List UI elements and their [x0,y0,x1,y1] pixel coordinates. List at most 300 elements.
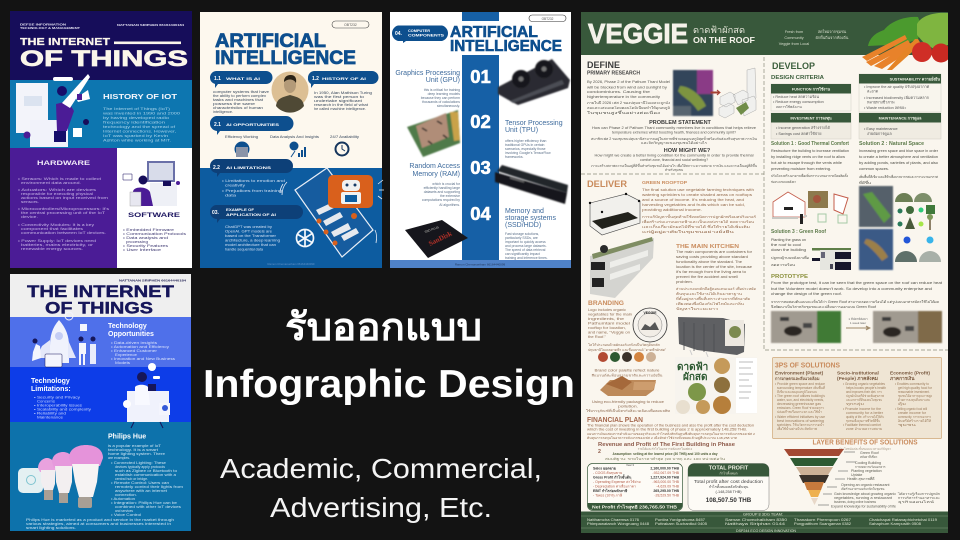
text block: philips hue: remotely control their lights from [115,485,183,489]
text block: ram: the extensive [440,194,460,198]
text block: gpu: simultaneously. [437,104,460,108]
text block: solution 1: hot air to escape through the vents while [771,161,842,165]
title: INTELLIGENCE [450,38,562,55]
table: profit and loss: -28,529.50 THB [654,494,680,498]
text block: history: IoT was sparked by Kevin [103,133,168,138]
column: economic: ชุมชน [898,423,918,428]
chart labels: benefit layers: ธุรกิจออนไลน์ [898,500,934,505]
text block: hardware list: sensors. [21,200,39,204]
icon: phone with chat bubbles [280,168,377,257]
text block: main kitchen: functionality above the standard. The [676,260,742,264]
column: socio-institutional: ทุกกลุ่ม [846,402,864,407]
heading: technology limitations: Technology [31,378,70,385]
column: economic: community. การขายอาหาร [898,415,931,419]
course tag [529,15,566,22]
pill: computer components: COMPONENTS [408,34,445,38]
chart labels: benefit layers [818,451,940,508]
text block: solution 3: ปลูกหญ้าบนหลังคาเพื่อ [771,255,809,260]
section: problem statement: temperature extremes whilst boosting health, finances and community spirit? [612,130,736,134]
column: economic: reasonable investment. [898,390,930,394]
text block: branding: vegetables for the main [588,312,632,316]
arrow: one week later: 1 สัปดาห์ต่อมา [848,317,868,321]
title: ARTIFICIAL [215,30,326,52]
illustration: person with megaphone [16,74,90,147]
title: THE INTERNET [27,283,174,301]
text block: solution 1: Restructure the building to increase ventilation [771,149,849,153]
column: economic: อินทรีย์สร้างรายได้ให้ [898,418,931,423]
heading: layer benefits: LAYER BENEFITS OF SOLUTIONS [812,440,918,446]
opportunity labels [225,135,359,139]
text block: hardware list: • Connectivity Modules: It is a key [18,223,94,227]
text block: green rooftop: GREEN ROOFTOP [642,180,688,186]
pill: history of ai: 1.2 [312,76,319,82]
chart labels: benefit layers: vegetables, running a restaurant [834,496,892,500]
text block: storage: important to quickly access [505,240,546,244]
card: total profit [688,464,769,510]
card: maintenance: ง่ายต่อการดูแล [867,132,892,136]
image: vegetables [862,13,950,70]
heading: revenue and profit: รายได้และกำไรในอาคารหลังแรกในเฟส 2 [638,447,693,451]
text block: main kitchen: ต้นทุนและใช้งานได้เกินมาตรฐาน [676,292,743,297]
image: sandisk ssd: SanDisk [427,230,453,248]
step numbers [470,66,491,224]
text block: main kitchen: prevent the fire accident and smell [676,275,738,279]
card: total profit: 108,507.50 THB [706,497,752,504]
course tag: OBT232 [344,23,357,27]
text block: philips hue: is a popular example of IoT [108,444,162,448]
text block: branding: and name, "Veggie on [588,330,630,334]
text block: hardware list: • Power Supply: IoT devices need [18,239,96,243]
heading: gpu [395,70,460,84]
text block: packaging note: pollution. [618,404,638,408]
heading: ram [409,163,460,178]
text block: primary research: By 2026, Phase 2 of the Pathum Thani Model [587,80,670,84]
column: socio-institutional: • Facilitate thermal comfort [843,423,881,427]
text block: history: Ashton while working at MIT. [103,138,171,142]
column: environment: sprinklers. ใช้นวัตกรรมการรดน้ำ [777,422,824,427]
text block: financial plan [587,415,755,441]
text block: green rooftop [642,180,756,235]
text block: software list: • Data analysis and [123,236,168,240]
opportunity labels: Efficiency Working [225,135,258,139]
image: site map [673,70,713,116]
column: socio-institutional: ปลูกผักอินทรีย์ช่วยเพิ่มสุขภาพ [846,393,884,399]
text block: solution 2: ที่ดีขึ้น [859,180,872,185]
text block: what is ai: computer systems that have [213,90,269,94]
text block: ram [422,182,461,207]
card: sustainability: • Waste reduction ลดขยะ [864,106,906,110]
card: sustainability: หลายทางชีวภาพ [867,100,895,104]
column: economic: get high quality food for [898,386,933,390]
chart: benefits funnel [784,449,844,505]
text block: primary research: PRIMARY RESEARCH [587,70,640,76]
text block: solution 1: by installing ridge vents on the roof to allow [771,155,845,159]
text block: chatgpt: ChatGPT was created by [225,225,272,229]
text block: software list: • Embedded Firmware [123,228,174,232]
chart labels: benefit layers: เปิดร้านอาหารออร์แกนิกในชุมชน [841,487,884,492]
text block: branding: BRANDING [588,300,624,307]
text block: philips hue: • Automation [111,497,135,501]
icon: robot on orange card [328,175,384,208]
column: environment: Environment (Planet) [775,370,824,376]
text block: solution 3: Solution 3 : Green Roof [771,229,826,235]
heading: storage [505,208,556,229]
title [20,36,188,71]
panel: artificial intelligence poster one [200,12,384,268]
image: menu poster: ผักสด [683,371,708,383]
card: investment [771,113,851,139]
text block: prototype: change the design of the green roof. [771,292,842,296]
text block: limitations: Maintenance [37,416,63,420]
heading: design criteria: DESIGN CRITERIA [771,75,824,81]
headline: Infographic Design [203,363,575,406]
column: environment: ปล่อยก๊าซเรือนกระจก และใช้น้ำ [777,409,822,414]
text block: marketing note: Philips Hue is marketed as a product and service in the market through [26,518,174,522]
text block: gpu: thousands of calculations [422,100,460,104]
heading: gpu: Unit (GPU) [426,77,460,84]
table: profit and loss: - Depreciation ค่าเสื่อมราคา [593,484,636,488]
text block: philips hue: home lighting system. There [108,452,165,456]
heading: technology opportunities: Technology [108,323,147,330]
illustration: presenter [123,363,170,428]
image: menu poster [675,357,757,414]
text block: green rooftop: เพื่อสร้างร่มเงาบนดาดฟ้าและเป็นแหล่งรายได้ ลดความร้อน [642,218,755,224]
text block: opportunities: • Innovation and New Business [111,357,175,361]
text block: main kitchen: ส่วนประกอบหลักคือตู้คอนเทนเนอร์ เพื่อประหยัด [676,286,756,291]
footer band: Natthamcha Chaemsa 0176 [587,518,639,522]
text block: chatgpt: architecture, a deep learning [225,238,280,242]
chart labels: benefit layers: Opening an organic restaurant [841,483,890,487]
column: environment [775,370,825,431]
heading: ram: Random Access [409,163,460,170]
table: profit and loss: Year 3 [626,463,634,467]
image: green roof section [812,248,851,270]
text block: branding: ingredients, the [588,317,624,321]
text block: opportunities: • Enhanced Customer [111,349,158,353]
text block: solution 1: ช่องระบายบนหลังคา [771,180,796,184]
text block: hardware list [18,177,109,251]
table: profit and loss: Sales ยอดขาย [593,466,616,470]
panel: 3ps of solutions [772,358,942,438]
table: profit and loss: - Operating Expense ค่าใช้จ่าย [593,479,641,484]
pill: computer components [392,26,448,43]
poster credits: DEFSE INFORMATION [20,22,66,26]
illustration: person at desk [123,161,180,206]
column: socio-institutional: quality of life. สร้างรายได้ให้กับ [846,415,884,419]
text block: opportunities: • Data-driven insights [111,341,157,345]
heading: revenue and profit: 2 [598,449,601,455]
text block: financial plan: ต้นทุนการลงทุนในอาคารหลังแรกของเฟส 2 เมื่อหักค่าใช้จ่ายทั้งหมดแล้วอยู่ที่ประมาณ 148,258 บาท [587,435,737,441]
card: function: ลดการใช้พลังงาน [776,105,803,109]
column: socio-institutional: zone อำนวยความสบาย [846,427,882,431]
text block: limitations: • Prejudices from training [222,189,282,193]
text block: storage: can significantly impact [505,252,540,256]
image: tpu board [407,110,460,157]
table: profit and loss: Net Profit กำไรสุทธิ 236,765.50 THB [592,504,677,510]
pill: ai limitations: 2.2 [213,165,220,171]
text block: solution 2: common spaces. [859,167,889,171]
section: how might we: HOW MIGHT WE? [664,148,711,154]
text block: hardware list: actions based on input received from [21,196,108,200]
column: socio-institutional: helps boosts people's health [846,386,886,390]
section: problem statement: และจิตวิญญาณของชุมชนได้อย่างไร [641,141,707,146]
card: sustainability: SUSTAINABILITY ความยั่งยืน [890,76,940,82]
chart labels: benefit layers: การบริหารร้านอาหารและ [898,496,940,500]
table: profit and loss: -963,000.00 THB [652,480,680,484]
column: environment: การเกษตรและสิ่งแวดล้อม [775,375,820,381]
icon: veggie logo [633,308,667,342]
pill: what is ai: WHAT IS AI [226,76,260,81]
column: socio-institutional: • Growing organic vegetables [843,382,885,386]
text block: green rooftop: การแก้ปัญหาขั้นสุดท้ายใช้เทคนิคการปลูกผักพร้อมสปริงเกอร์ [642,214,756,220]
arrow: map to sketch [711,90,720,95]
image: ram sticks [495,165,568,204]
text block: what is ai: characteristics of human [213,106,263,110]
footer band: Natthaya Siriphan 0144 [725,522,785,526]
text block: hardware list: component that facilitates [21,227,83,231]
title: INTELLIGENCE [215,47,356,69]
footer band: Chatchapat Ratanaphichetchai 0119 [869,518,937,522]
text block: hardware list: environment data around. [21,181,81,185]
text block: hardware list: device. [21,215,38,219]
header band: ดาดฟ้าผักสด [693,25,745,35]
icon: clock availability [336,142,348,156]
pill: ai limitations [210,159,293,177]
text block: primary research: will be blocked from wind and sunlight by [587,86,667,90]
text block: tpu: involving Google's TensorFlow [505,151,551,155]
text block: main kitchen: saving costs providing above standard [676,255,748,259]
text block: primary research: highertemperature in the community [587,95,660,99]
pill: what is ai [210,71,272,88]
section: how might we: comfort zone, financial and social wellbeing? [640,158,708,162]
poster credits: TECHNOLOGY & MANAGEMENT [20,26,81,30]
panel: internet of things poster two [10,274,191,531]
text block: prototype: PROTOTYPE [771,274,808,280]
chart labels: benefit layers: หลังคาสีเขียว [860,455,878,459]
card: total profit: (-148,258 THB) [715,490,742,494]
title: OF THINGS [45,300,153,318]
column: socio-institutional: (People) ภาคสังคม [837,375,878,382]
text block: branding: โลโก้ประกอบด้วยผักออร์แกนิกเป็นวัตถุดิบหลัก [588,341,660,348]
column: environment: water, sun, and electricity needs, [777,398,824,402]
heading: technology limitations: Limitations: [31,386,71,393]
text block: primary research: ลมและแสงแดดโดยคอนโดมิเนียมทำให้อุณหภูมิ [587,105,670,111]
chart labels: benefit layers: business, doing online business [834,500,876,504]
pill: history of ai: HISTORY OF AI [322,76,366,81]
arrow: one week later: 1 week later [850,321,866,325]
heading: storage: Memory and [505,208,544,215]
column: socio-institutional: ชุมชนเพื่อคุณภาพชีวิตที่ดีขึ้น [846,418,881,424]
card: function: • Reduce energy consumption [773,100,824,104]
section: problem statement: สมาชิกเฟส 2 ของชุมชนปทุมธานีสามารถอยู่ในสภาพที่ช่วยลดอุณหภูมิสุดขั้วพร้อมกับส่งเสริมสุขภาพ การเงิน [591,136,758,142]
card: total profit: TOTAL PROFIT [709,466,749,472]
text block: solution 3: down the building [771,248,806,252]
heading: revenue and profit [598,442,735,462]
card: total profit: Total profit after cost deduction [694,479,764,484]
text block: packaging note: ใช้บรรจุภัณฑ์ที่เป็นมิตรกับสิ่งแวดล้อมเพื่อลดมลพิษ [586,407,670,414]
text block: branding: Pathumtani model [588,322,630,326]
text block: philips hue: devices typically apply protocols [115,465,165,469]
portrait: alan turing [272,72,308,113]
text block: chatgpt: handle sequential data [225,248,264,252]
text block: solution 3: Planting the grass on [771,238,806,242]
card: sustainability [859,74,941,112]
heading: storage: storage systems [505,215,556,222]
text block: limitations: • Scalability and complexity [34,408,91,412]
chart labels: benefit layers: Expand knowledge for sustainability of life [831,504,896,508]
heading: storage: (SSD/HDD) [505,222,541,229]
pill: what is ai: 1.1 [214,76,221,82]
section: problem statement [591,120,758,146]
column: economic: คุ้ม [898,402,906,407]
text block: primary research [587,70,670,116]
chart labels: benefit layers: การลดความร้อนอาคาร [855,465,886,469]
column: economic: create income for [898,411,927,415]
image: packaging box [600,376,656,396]
header band: Community [784,36,804,40]
pill: ai opportunities: AI OPPORTUNITIES [226,122,279,127]
heading: revenue and profit: Assumption: selling at the lowest price (30 THB) and 100 units a day [612,452,718,456]
text block: green rooftop: providing additional income. [642,207,702,212]
text block: prototype: but the Volunteer model doesn't work. So develop into a community enterprise and [771,287,932,291]
column: socio-institutional: community for a better [846,411,884,415]
pill: example of application: 03. [212,210,220,216]
text block: philips hue: • Remote Control: Users can [111,481,169,485]
heading: tpu: Unit (TPU) [505,127,538,134]
text block: financial plan: FINANCIAL PLAN [587,415,643,424]
text block: what is ai: intelligence. [213,110,233,114]
text block: philips hue: are examples. [108,456,130,460]
text block: history of ai [314,91,372,111]
text block: software list: • Security Features [123,244,168,248]
header band [581,12,948,55]
text block: financial plan: แผนการเงินแสดงการดำเนินงานของธุรกิจและกำไรหลังหักต้นทุนซึ่งต้นทุนการลงทุนในอาคารหลังแรกของเฟส 2 [587,432,755,437]
column: socio-institutional: and improves their diet. การ [846,390,882,394]
text block: green rooftop: watering sprinklers to create shaded areas on rooftops [642,192,752,197]
subheadline: Academic, Commercial, [220,453,542,484]
text block: brand palette note: Brand color palette reflect nature [594,368,660,372]
heading: deliver: DELIVER [587,179,627,190]
text block: history: was invented in 1990 and 2000 [103,110,181,116]
header band: ON THE ROOF [693,35,755,45]
table: profit and loss: Gross Profit กำไรขั้นต้น [593,474,632,480]
text block: solution 3: the roof to cool [771,243,801,247]
title [27,283,174,318]
image: gpu card [498,59,570,105]
text block: software list: • Communication Protocols [123,232,186,236]
image: rooftop planter frame [589,193,640,235]
text block: history: technology and the spread of [103,124,176,129]
text block: history of ai: he called machine intelligence. [314,107,366,111]
text block: storage: particularly SSDs, are [505,236,538,240]
footer band: Sarnan Chomchaikham 8350 [725,518,787,522]
text block: primary research: ในชุมชนสูงขึ้นอย่างต่อเนื่อง [587,110,661,116]
text block: history: by having developed radio [103,115,170,120]
text block: marketing note: various strategies, aimed at consumers and businesses interested in [26,522,171,526]
image: building sketch [719,68,756,118]
panel: artificial intelligence poster two [390,12,571,268]
heading: history of iot: HISTORY OF IOT [103,92,178,101]
column: economic [890,370,933,428]
step numbers: 04 [470,203,491,224]
card: sustainability: สะอาด [867,88,879,94]
text block: gpu [421,88,460,108]
heading: tpu [505,120,563,134]
pill: computer components: 04. [395,31,403,37]
text block: main kitchen: ที่ตั้งอยู่กลางพื้นที่เพราะห่างจากที่พักอาศัย [676,296,750,301]
text block: branding: Logo includes organic [588,308,626,312]
text block: primary research: condominiums. Causing the [587,90,650,94]
footer band: GROUP 8 3DG TEAM: [743,512,783,516]
text block: solution 1: Solution 1 : Good Thermal Comfort [771,141,849,147]
text block: main kitchen: THE MAIN KITCHEN [676,244,739,250]
image: prototype before [771,311,841,343]
text block: philips hue: central hub or bridge. [115,477,148,481]
text block: solution 1: preventing moisture from entering. [771,167,831,171]
text block: hardware list: the central processing unit of the IoT [21,211,106,215]
text block: solution 1: ปรับโครงสร้างอาคารเพื่อเพิ่มการระบายอากาศโดยติดตั้ง [771,173,848,178]
opportunity labels: 24/7 Availability [330,135,359,139]
text block: philips hue: connection. [115,493,137,497]
section: problem statement: How can Phase 2 of Pathum Thani community members live in conditions that helps relieve [592,126,756,130]
color palette [598,352,656,362]
text block: tpu: traditional GPUs in certain [505,143,545,147]
step numbers: 03 [470,157,491,178]
chart labels: benefit layers: Uptake [851,473,862,477]
column: environment: surrounding temperature เพิ่มพื้นที่ [777,385,825,390]
image: philips hue bulbs and bridge [18,445,103,508]
text block: opportunities [111,341,175,365]
text block: prototype: From the prototype test, it can be seen that the green space on the roof can reduce heat [771,281,943,285]
subheadline [220,453,542,523]
text block: history: The Internet of Things (IoT) [103,106,171,111]
text block: ram: datasets and supporting [424,190,460,194]
footer band: Puttrakarn Suchantkul 0405 [655,522,707,526]
image: kitchen container [678,317,745,357]
footer band: Puntira Yordgrahoma 8457 [655,518,705,522]
opportunity labels: Data Analysis And Insights [270,135,319,139]
text block: software list: • User Interface [123,248,161,252]
image: site plan aerial [859,186,893,270]
poster credit: NATTANAN SRIPHEN 66164440184 [119,278,187,282]
subheadline: Advertising, Etc. [270,492,492,523]
text block: limitations: • Reliability and [34,412,66,416]
pill: example of application: APPLICATION OF AI [226,213,276,217]
heading: develop: DEVELOP [772,61,816,72]
text block: limitations: • Security and Privacy [34,396,80,400]
text block: philips hue: such as Zigbee or Bluetooth to [115,469,177,473]
pill: example of application [210,205,303,223]
text block: storage: Fast storage solutions, [505,232,539,236]
text block: solution 2: Solution 2 : Natural Space [859,141,924,147]
text block: chatgpt [225,225,280,252]
text block: main kitchen: problem. [676,280,693,284]
card: investment: • Savings cost ลดค่าใช้จ่าย [776,131,821,136]
pill: history of ai [308,71,378,88]
arrow: one week later [846,317,870,330]
panel: 3ps of solutions: 3PS OF SOLUTIONS [775,360,840,370]
text block: chatgpt: OpenAI. GPT models are [225,230,272,234]
text block: ram: efficiently handling large [424,186,460,190]
text block: opportunities: Experience [115,353,137,357]
footer band: Sahaphum Kampusith 0508 [869,522,921,526]
text block: hardware list: renewable energy sources. [21,247,83,251]
footer credit: Ramon Chemaruetham 66164440099 [268,262,315,266]
text block: history of ai: In 1950, Alan Mathison Turing [314,91,372,95]
panel: veggie on the roof poster [581,12,950,533]
column: environment: emissions. Green Roof ช่วยลดการ [777,406,824,410]
text block: history of ai: undertake significant [314,99,362,103]
